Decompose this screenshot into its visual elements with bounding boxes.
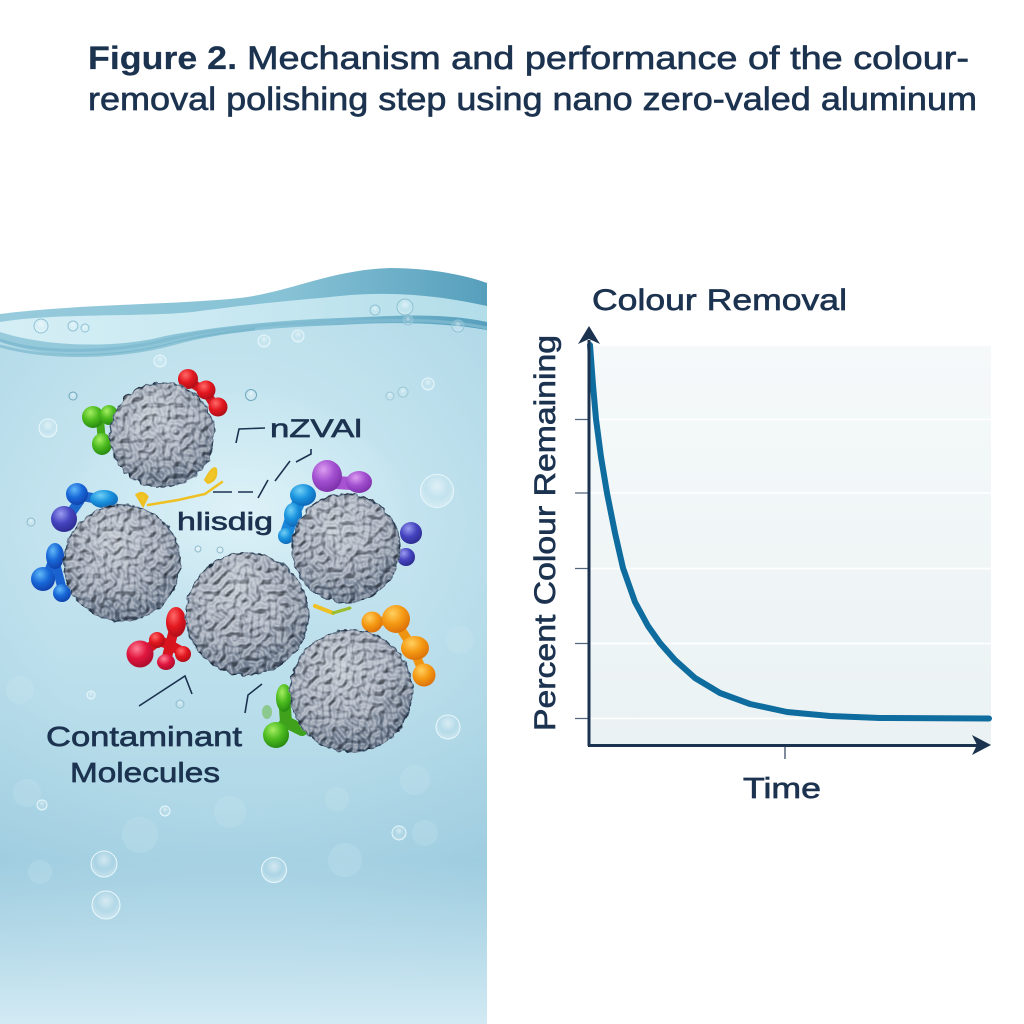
decay curve <box>590 345 989 718</box>
leader lines <box>139 428 311 713</box>
molecule: purple <box>312 460 372 493</box>
nZVAl particle 2 <box>64 505 180 621</box>
label: nZVAl: nZVAl <box>270 415 362 443</box>
panel: water mechanism illustration <box>0 268 487 1024</box>
molecule: crimson <box>126 607 191 670</box>
molecule: green, bottom <box>262 684 302 748</box>
wave surface <box>0 268 487 356</box>
x axis label: Time <box>743 773 821 805</box>
title: Mechanism and performance of the colour- <box>247 40 969 76</box>
soft background blobs <box>14 796 438 884</box>
molecule: blue, left <box>31 483 118 602</box>
label: contaminant molecules: Contaminant <box>46 721 242 752</box>
nZVAl particle 3 <box>292 494 400 602</box>
chart: colour removal <box>529 284 991 805</box>
y axis label: Percent Colour Remaining <box>529 335 562 731</box>
title: removal polishing step using nano zero-valed aluminum <box>88 81 977 117</box>
molecule: green, top <box>82 405 118 455</box>
nZVAl particle 4 <box>186 553 308 675</box>
yellow linkers <box>137 468 350 613</box>
x tick <box>784 746 786 759</box>
title <box>88 40 977 117</box>
x axis with arrow <box>588 735 991 755</box>
y ticks <box>575 420 588 718</box>
gridlines <box>590 420 991 718</box>
label: contaminant molecules: Molecules <box>70 757 220 788</box>
molecule: indigo, right <box>397 522 422 566</box>
chart title: Colour Removal <box>592 284 847 317</box>
plot background <box>590 346 991 745</box>
bubbles <box>27 299 464 919</box>
title: Figure 2. <box>88 40 237 76</box>
y axis with arrow <box>578 326 600 746</box>
label: binding: hlisdig <box>177 508 273 536</box>
nZVAl particle 5 <box>290 630 412 752</box>
nZVAl particle 1 <box>110 383 214 487</box>
water body <box>0 310 487 1024</box>
label: contaminant molecules <box>47 726 242 783</box>
molecule: blue, right <box>278 484 316 544</box>
molecule: red, top <box>178 369 228 416</box>
molecule: orange <box>362 605 436 686</box>
